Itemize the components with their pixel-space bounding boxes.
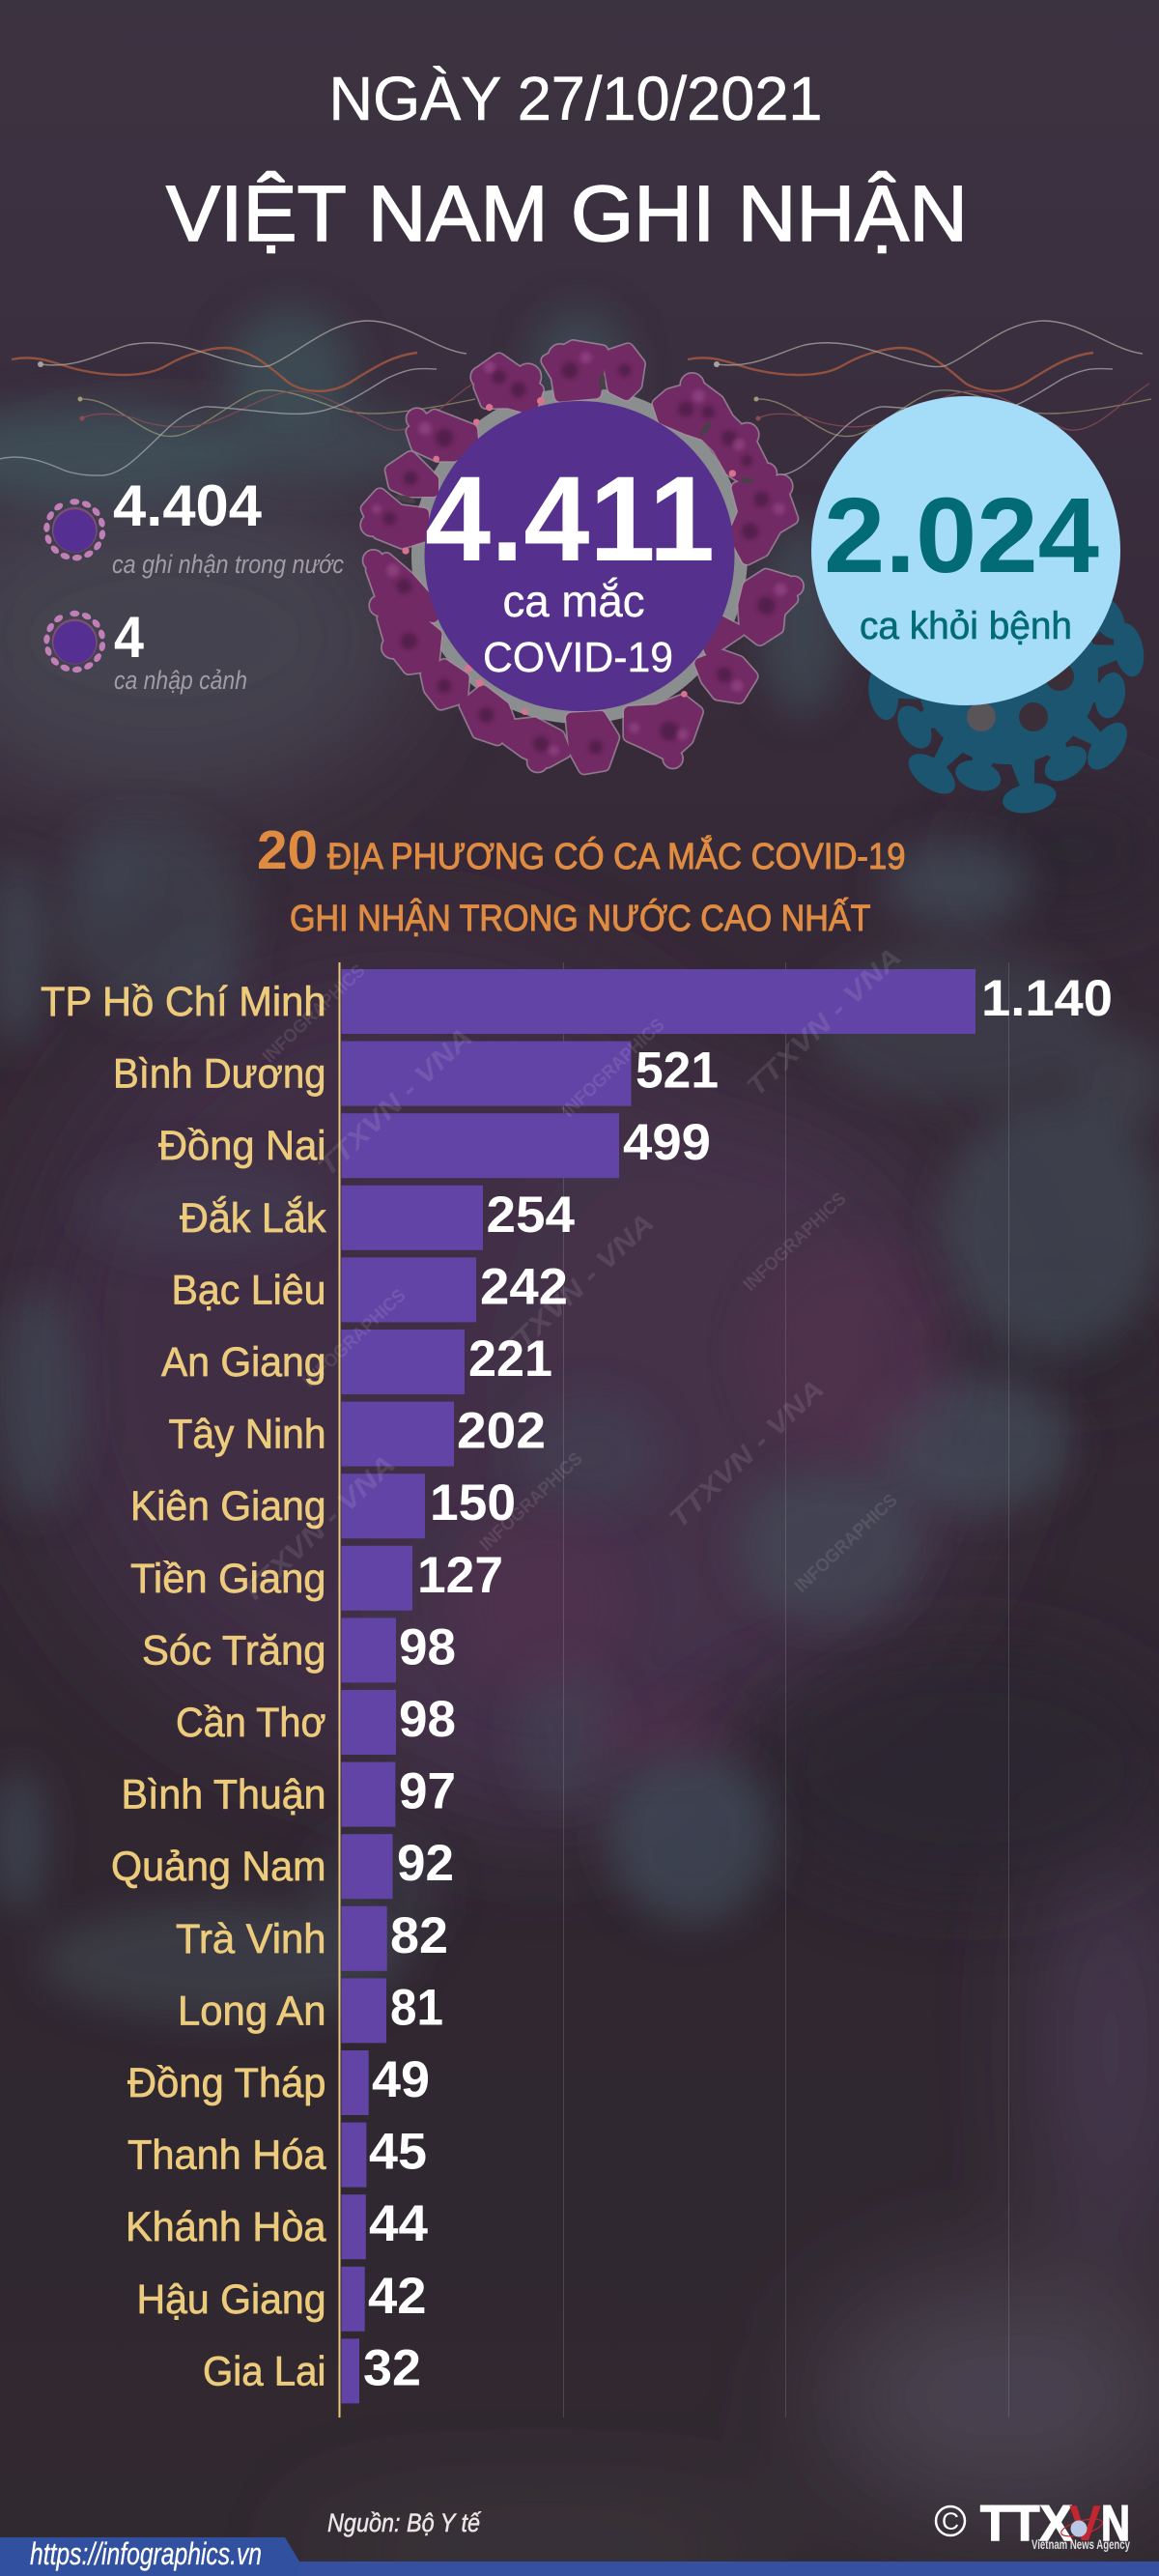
label: ca mắc: ca mắc bbox=[502, 576, 645, 626]
chart heading: ĐỊA PHƯƠNG CÓ CA MẮC COVID-19 bbox=[327, 835, 906, 877]
chart heading bbox=[257, 819, 906, 939]
row: Quảng Nam: 92 bbox=[397, 1835, 454, 1892]
row: TP Hồ Chí Minh: TP Hồ Chí Minh bbox=[41, 979, 326, 1025]
row: Đồng Nai: Đồng Nai bbox=[158, 1123, 326, 1169]
row: Long An: Long An bbox=[178, 1988, 326, 2034]
watermarks bbox=[235, 942, 907, 1609]
row: Bạc Liêu: Bạc Liêu bbox=[172, 1267, 326, 1313]
row: Đồng Tháp: 49 bbox=[372, 2051, 430, 2108]
row: Bình Dương bbox=[113, 1042, 719, 1106]
row: Quảng Nam bbox=[111, 1834, 454, 1899]
row: Trà Vinh: Trà Vinh bbox=[176, 1916, 326, 1962]
row: Tây Ninh bbox=[168, 1402, 546, 1467]
watermarks: INFOGRAPHICS bbox=[299, 1285, 410, 1392]
row: Kiên Giang bbox=[130, 1474, 516, 1538]
row: Trà Vinh bbox=[176, 1906, 448, 1971]
row: Bình Dương: Bình Dương bbox=[113, 1051, 326, 1098]
chart heading: GHI NHẬN TRONG NƯỚC CAO NHẤT bbox=[290, 897, 871, 939]
row: Khánh Hòa: 44 bbox=[369, 2195, 429, 2252]
stat: domestic cases bbox=[43, 473, 344, 579]
number: 4.404: 4.404 bbox=[113, 473, 263, 538]
title date: NGÀY 27/10/2021 bbox=[328, 64, 823, 133]
row: Thanh Hóa: Thanh Hóa bbox=[127, 2132, 326, 2179]
row: An Giang: An Giang bbox=[161, 1339, 326, 1386]
row: Long An: 81 bbox=[390, 1979, 443, 2036]
row: Tiền Giang: 127 bbox=[417, 1547, 503, 1604]
row: Đồng Tháp bbox=[127, 2050, 430, 2115]
row: An Giang: 221 bbox=[468, 1331, 552, 1388]
grid lines bbox=[564, 962, 1008, 2418]
row: Trà Vinh: 82 bbox=[390, 1907, 448, 1964]
row: Tiền Giang: Tiền Giang bbox=[130, 1556, 326, 1602]
row: An Giang bbox=[161, 1330, 552, 1394]
URL: https://infographics.vn bbox=[30, 2536, 262, 2571]
row: Tiền Giang bbox=[130, 1546, 503, 1611]
icon: large coronavirus bbox=[367, 346, 798, 768]
row: Sóc Trăng bbox=[142, 1617, 456, 1682]
watermarks: TTXVN - VNA bbox=[235, 1449, 401, 1609]
watermarks: TTXVN - VNA bbox=[494, 1208, 660, 1367]
row: Tây Ninh: 202 bbox=[457, 1403, 546, 1460]
logo: TTXVN: C bbox=[942, 2508, 959, 2535]
row: Đồng Nai: 499 bbox=[623, 1114, 711, 1171]
watermarks: INFOGRAPHICS bbox=[791, 1490, 902, 1597]
chart heading: 20 bbox=[257, 819, 318, 881]
row: Đắk Lắk bbox=[180, 1186, 576, 1250]
row: Bình Thuận: Bình Thuận bbox=[122, 1772, 326, 1818]
row: Bạc Liêu bbox=[172, 1257, 568, 1322]
row: Hậu Giang bbox=[137, 2267, 427, 2332]
caption: imported: ca nhập cảnh bbox=[114, 666, 247, 695]
row: Cần Thơ: Cần Thơ bbox=[176, 1700, 326, 1746]
row: Đồng Nai bbox=[158, 1113, 711, 1178]
recovered circle bbox=[811, 396, 1120, 705]
main title: VIỆT NAM GHI NHẬN bbox=[166, 170, 968, 258]
footer bar with URL bbox=[0, 2536, 1159, 2576]
logo: TTXVN: V bbox=[1069, 2496, 1101, 2552]
icon: small virus domestic bbox=[43, 499, 106, 561]
row: Kiên Giang: Kiên Giang bbox=[130, 1483, 326, 1530]
watermarks: TTXVN - VNA bbox=[664, 1374, 830, 1533]
row: Hậu Giang: Hậu Giang bbox=[137, 2276, 326, 2323]
watermarks: TTXVN - VNA bbox=[312, 1022, 478, 1182]
row: Đắk Lắk: 254 bbox=[487, 1187, 576, 1244]
number: 4: 4 bbox=[114, 605, 145, 670]
logo: TTXVN bbox=[936, 2496, 1130, 2552]
big number: total cases: 4.411 bbox=[425, 452, 715, 587]
watermarks: INFOGRAPHICS bbox=[740, 1188, 851, 1296]
row: Hậu Giang: 42 bbox=[368, 2268, 427, 2325]
big number: recovered: 2.024 bbox=[824, 476, 1099, 595]
row: Khánh Hòa bbox=[126, 2194, 429, 2259]
row: Quảng Nam: Quảng Nam bbox=[111, 1844, 326, 1890]
decorative wave lines bbox=[0, 321, 1151, 475]
row: Sóc Trăng: 98 bbox=[399, 1618, 456, 1675]
watermarks: TTXVN - VNA bbox=[741, 942, 907, 1102]
caption: domestic: ca ghi nhận trong nước bbox=[112, 550, 344, 579]
row: Cần Thơ: 98 bbox=[399, 1691, 456, 1748]
row: Long An bbox=[178, 1978, 443, 2043]
row: Kiên Giang: 150 bbox=[430, 1474, 516, 1531]
row: Bình Dương: 521 bbox=[636, 1043, 719, 1100]
row: Bình Thuận: 97 bbox=[399, 1763, 456, 1820]
row: Gia Lai: 32 bbox=[363, 2339, 421, 2396]
row: Gia Lai: Gia Lai bbox=[203, 2348, 326, 2394]
row: Bạc Liêu: 242 bbox=[480, 1258, 568, 1315]
watermarks: INFOGRAPHICS bbox=[476, 1448, 587, 1556]
row: Sóc Trăng: Sóc Trăng bbox=[142, 1627, 326, 1674]
row: Thanh Hóa bbox=[127, 2123, 427, 2188]
axis line bbox=[338, 962, 340, 2418]
stat: imported cases bbox=[43, 605, 247, 695]
row: Khánh Hòa: Khánh Hòa bbox=[126, 2204, 326, 2250]
watermarks: INFOGRAPHICS bbox=[259, 960, 370, 1068]
source line: Nguồn: Bộ Y tế bbox=[327, 2508, 482, 2537]
row: Gia Lai bbox=[203, 2338, 421, 2403]
row: Đồng Tháp: Đồng Tháp bbox=[127, 2060, 326, 2106]
row: Thanh Hóa: 45 bbox=[369, 2124, 427, 2181]
row: TP Hồ Chí Minh bbox=[41, 969, 1113, 1034]
row: Bình Thuận bbox=[122, 1762, 456, 1827]
logo: TTXVN: TTX bbox=[980, 2496, 1072, 2552]
row: Cần Thơ bbox=[176, 1690, 456, 1755]
label: COVID-19: COVID-19 bbox=[483, 634, 673, 681]
row: Đắk Lắk: Đắk Lắk bbox=[180, 1195, 326, 1242]
row: TP Hồ Chí Minh: 1.140 bbox=[981, 970, 1113, 1027]
label: ca khỏi bệnh: ca khỏi bệnh bbox=[860, 605, 1072, 647]
watermarks: INFOGRAPHICS bbox=[558, 1015, 669, 1122]
row: Tây Ninh: Tây Ninh bbox=[168, 1412, 326, 1458]
bar chart: top 20 localities bbox=[41, 962, 1113, 2418]
icon: small virus imported bbox=[43, 611, 106, 673]
icon: blue recovered virus bbox=[864, 583, 1148, 817]
logo: TTXVN: N bbox=[1101, 2496, 1130, 2552]
